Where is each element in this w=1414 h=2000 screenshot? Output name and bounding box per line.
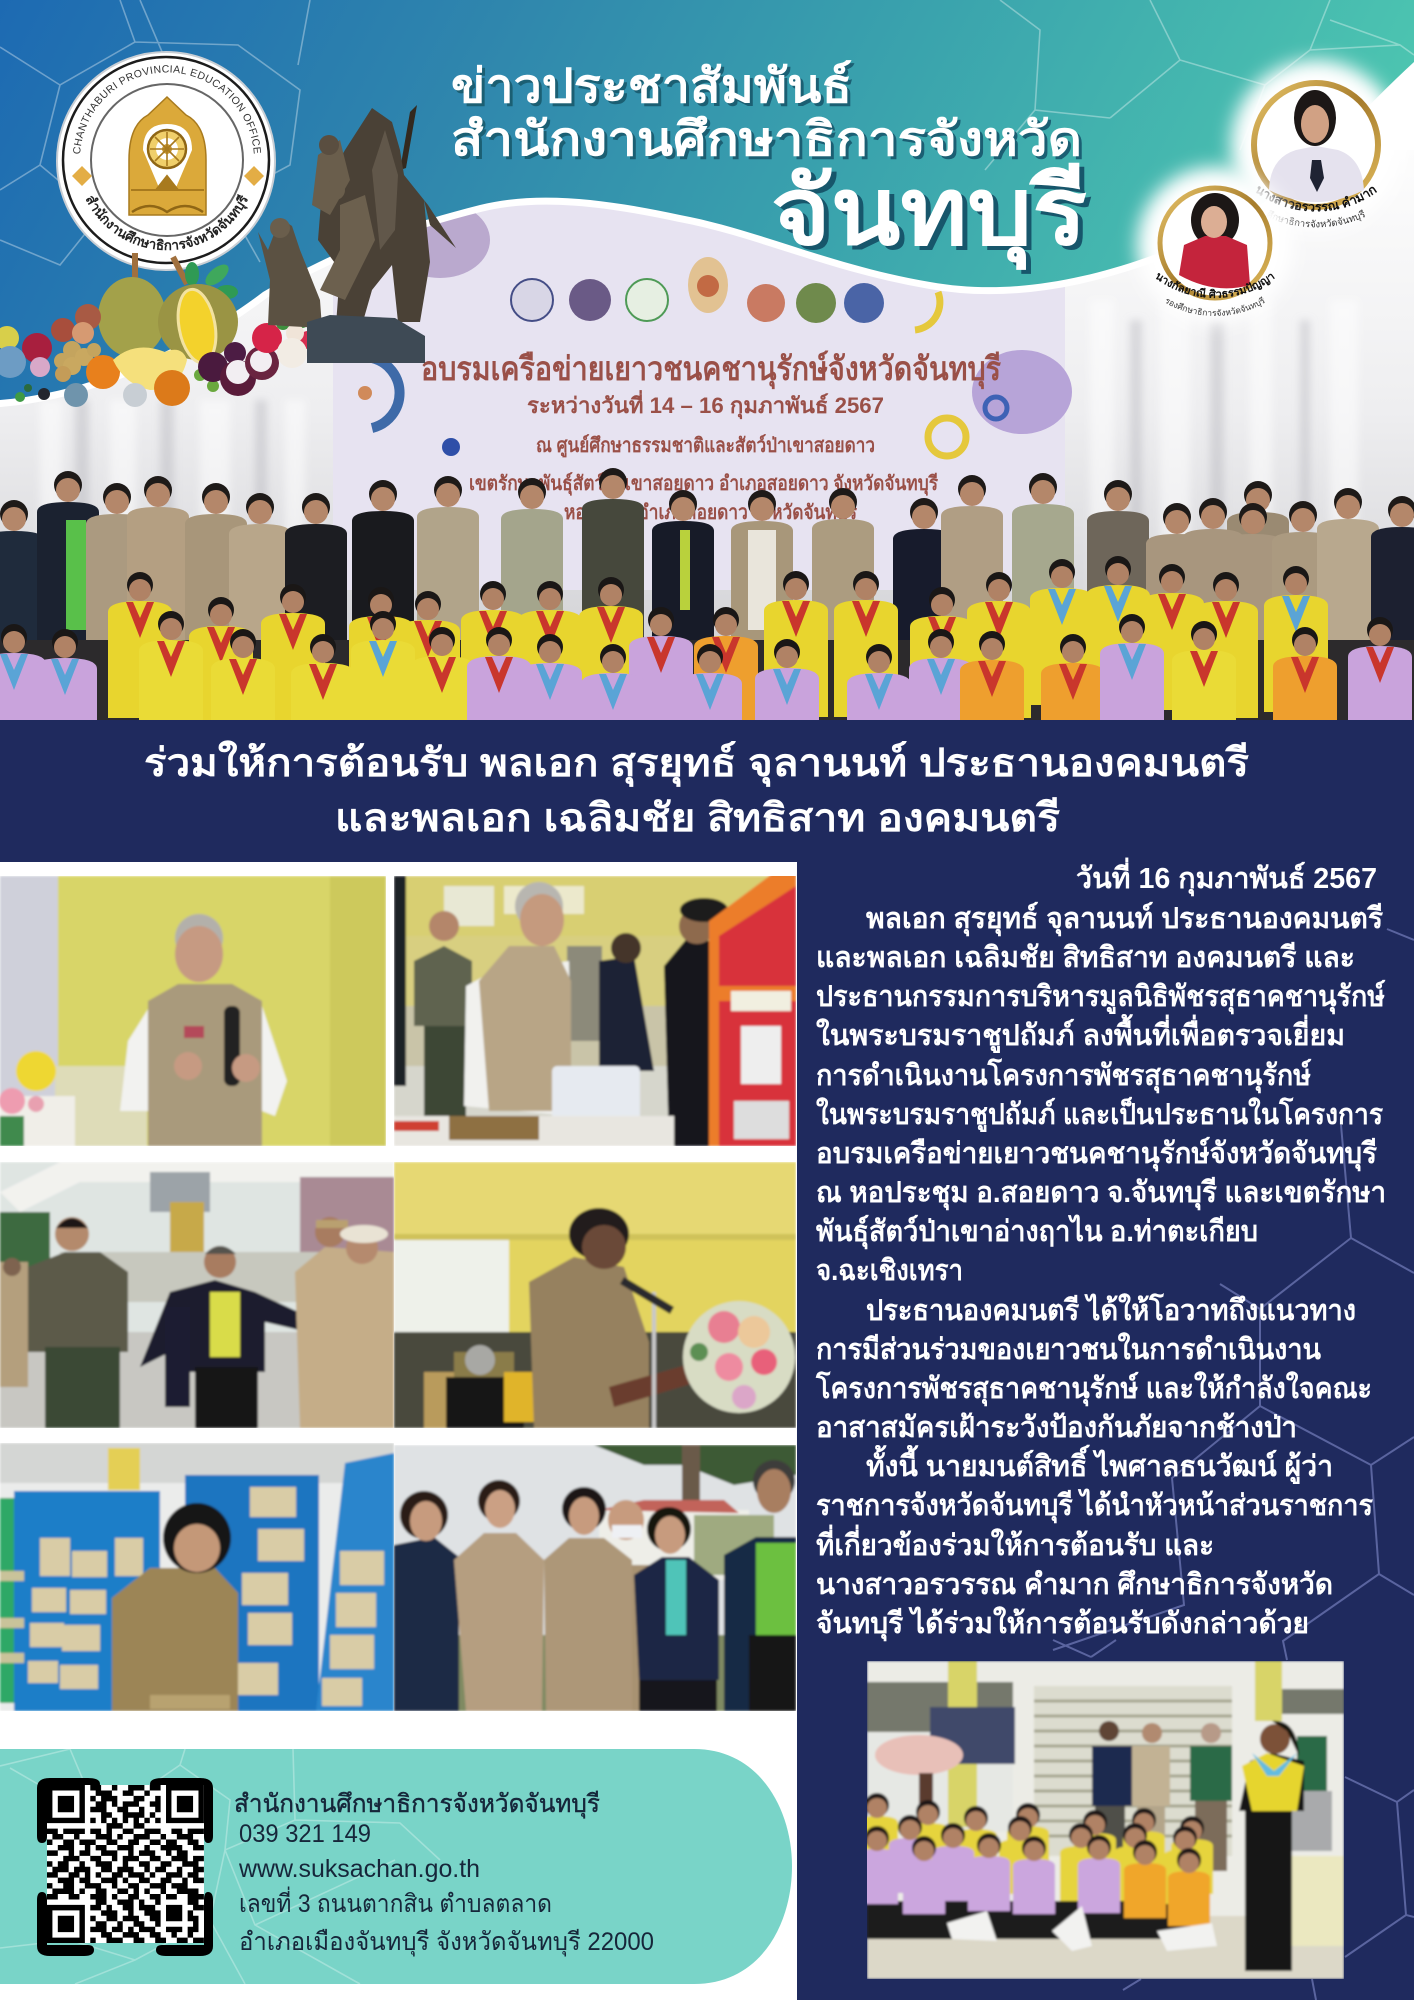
article text: วันที่ 16 กุมภาพันธ์ 2567 xyxy=(1076,857,1377,896)
photo: speaker with microphone xyxy=(0,876,386,1146)
logo: provincial education office: CHANTHABURI PROVINCIAL EDUCATION OFFICE xyxy=(73,65,262,154)
title: สำนักงานศึกษาธิการจังหวัด xyxy=(454,115,1085,168)
contact details: สำนักงานศึกษาธิการจังหวัดจันทบุรี xyxy=(234,1790,600,1819)
adults row xyxy=(0,468,1414,760)
article text: จันทบุรี ได้ร่วมให้การต้อนรับดังกล่าวด้วย xyxy=(816,1606,1309,1641)
banner text: หอประชุมอำเภอสอยดาว จังหวัดจันทบุรี xyxy=(564,501,857,525)
photo: walking delegation xyxy=(0,1162,394,1428)
headline text: และพลเอก เฉลิมชัย สิทธิสาท องคมนตรี xyxy=(335,797,1060,840)
logo: provincial education office: สำนักงานศึกษาธิการจังหวัดจันทบุรี xyxy=(86,194,248,250)
panel: header banner photo background xyxy=(0,150,1414,730)
article text: ณ หอประชุม อ.สอยดาว จ.จันทบุรี และเขตรักษา xyxy=(816,1177,1386,1210)
title: ข่าวประชาสัมพันธ์ xyxy=(454,62,855,115)
article text: ทั้งนี้ นายมนต์สิทธิ์ ไพศาลธนวัฒน์ ผู้ว่า xyxy=(866,1444,1333,1484)
article text: อบรมเครือข่ายเยาวชนคชานุรักษ์จังหวัดจันทบุรี xyxy=(816,1136,1377,1171)
contact details: www.suksachan.go.th xyxy=(238,1855,480,1883)
article text: อาสาสมัครเฝ้าระวังป้องกันภัยจากช้างป่า xyxy=(816,1412,1297,1444)
header wave xyxy=(0,0,1414,400)
article text: จ.ฉะเชิงเทรา xyxy=(816,1255,963,1287)
photo: officials standing outdoors xyxy=(394,1445,796,1711)
article text: การมีส่วนร่วมของเยาวชนในการดำเนินงาน xyxy=(816,1332,1321,1366)
banner text: ณ ศูนย์ศึกษาธรรมชาติและสัตว์ป่าเขาสอยดาว xyxy=(536,434,875,459)
portrait: provincial education officer xyxy=(1217,46,1392,228)
photo: official at exhibition boards xyxy=(0,1443,394,1711)
photo: inspecting project display xyxy=(394,876,796,1146)
article text: และพลเอก เฉลิมชัย สิทธิสาท องคมนตรี และ xyxy=(816,942,1355,974)
headline text xyxy=(144,740,1249,840)
logo gold emblem xyxy=(129,97,206,215)
title xyxy=(451,59,1092,274)
title: ข่าวประชาสัมพันธ์ xyxy=(451,59,852,112)
article text: ในพระบรมราชูปถัมภ์ ลงพื้นที่เพื่อตรวจเยี่ยม xyxy=(816,1013,1345,1053)
title: สำนักงานศึกษาธิการจังหวัด xyxy=(451,112,1082,165)
photo: official at podium xyxy=(394,1162,796,1428)
banner logos xyxy=(511,257,884,323)
headline text: ร่วมให้การต้อนรับ พลเอก สุรยุทธ์ จุลานนท์ ประธานองคมนตรี xyxy=(144,740,1249,787)
banner text: อบรมเครือข่ายเยาวชนคชานุรักษ์จังหวัดจันทบุรี xyxy=(421,350,1001,390)
title: จันทบุรี xyxy=(771,159,1087,270)
group photo people xyxy=(0,468,1414,720)
portrait: deputy education officer xyxy=(1123,153,1304,329)
contact details xyxy=(234,1790,654,1957)
article text: การดำเนินงานโครงการพัชรสุธาคชานุรักษ์ xyxy=(816,1057,1312,1093)
statue pedestal xyxy=(307,315,425,363)
banner text xyxy=(421,350,1001,525)
event backdrop banner xyxy=(333,170,1072,590)
panel: headline band xyxy=(0,720,1414,862)
children front row xyxy=(0,607,1412,790)
article text: ประธานองคมนตรี ได้ให้โอวาทถึงแนวทาง xyxy=(866,1292,1356,1327)
children back row xyxy=(108,556,1328,743)
banner text: เขตรักษาพันธุ์สัตว์ป่าเขาสอยดาว อำเภอสอยดาว จังหวัดจันทบุรี xyxy=(469,472,938,496)
article text: ราชการจังหวัดจันทบุรี ได้นำหัวหน้าส่วนราชการ xyxy=(816,1488,1373,1523)
article text: พันธุ์สัตว์ป่าเขาอ่างฤาไน อ.ท่าตะเกียบ xyxy=(816,1214,1258,1249)
article text: นางสาวอรวรรณ คำมาก ศึกษาธิการจังหวัด xyxy=(816,1569,1333,1601)
panel: article background xyxy=(797,862,1414,2000)
article text: โครงการพัชรสุธาคชานุรักษ์ และให้กำลังใจคณะ xyxy=(815,1370,1372,1406)
photo: youth camp session xyxy=(867,1661,1344,1979)
fruits and gems cluster xyxy=(0,253,317,407)
panel: contact pill xyxy=(0,1749,792,1984)
statue: Taksin on horseback xyxy=(258,105,456,363)
article text: พลเอก สุรยุทธ์ จุลานนท์ ประธานองคมนตรี xyxy=(866,901,1383,936)
portrait: provincial education officer: ศึกษาธิการจังหวัดจันทบุรี xyxy=(1269,209,1365,228)
qr code xyxy=(37,1778,213,1956)
article text: ประธานกรรมการบริหารมูลนิธิพัชรสุธาคชานุรักษ์ xyxy=(816,979,1386,1014)
contact details: 039 321 149 xyxy=(239,1820,371,1848)
contact details: เลขที่ 3 ถนนตากสิน ตำบลตลาด xyxy=(239,1886,552,1918)
logo: provincial education office xyxy=(56,51,276,271)
title: จันทบุรี xyxy=(776,163,1092,274)
article text xyxy=(815,857,1386,1641)
portrait: deputy education officer: รองศึกษาธิการจังหวัดจันทบุรี xyxy=(1166,296,1264,316)
portrait: deputy education officer: นางกัลยาณี ศิวธรรมปัญญา xyxy=(1156,273,1275,298)
portrait: provincial education officer: นางสาวอรวรรณ คำมาก xyxy=(1256,186,1377,212)
contact details: อำเภอเมืองจันทบุรี จังหวัดจันทบุรี 22000 xyxy=(239,1928,654,1957)
banner text: ระหว่างวันที่ 14 – 16 กุมภาพันธ์ 2567 xyxy=(527,389,884,420)
article text: ที่เกี่ยวข้องร่วมให้การต้อนรับ และ xyxy=(816,1524,1214,1562)
